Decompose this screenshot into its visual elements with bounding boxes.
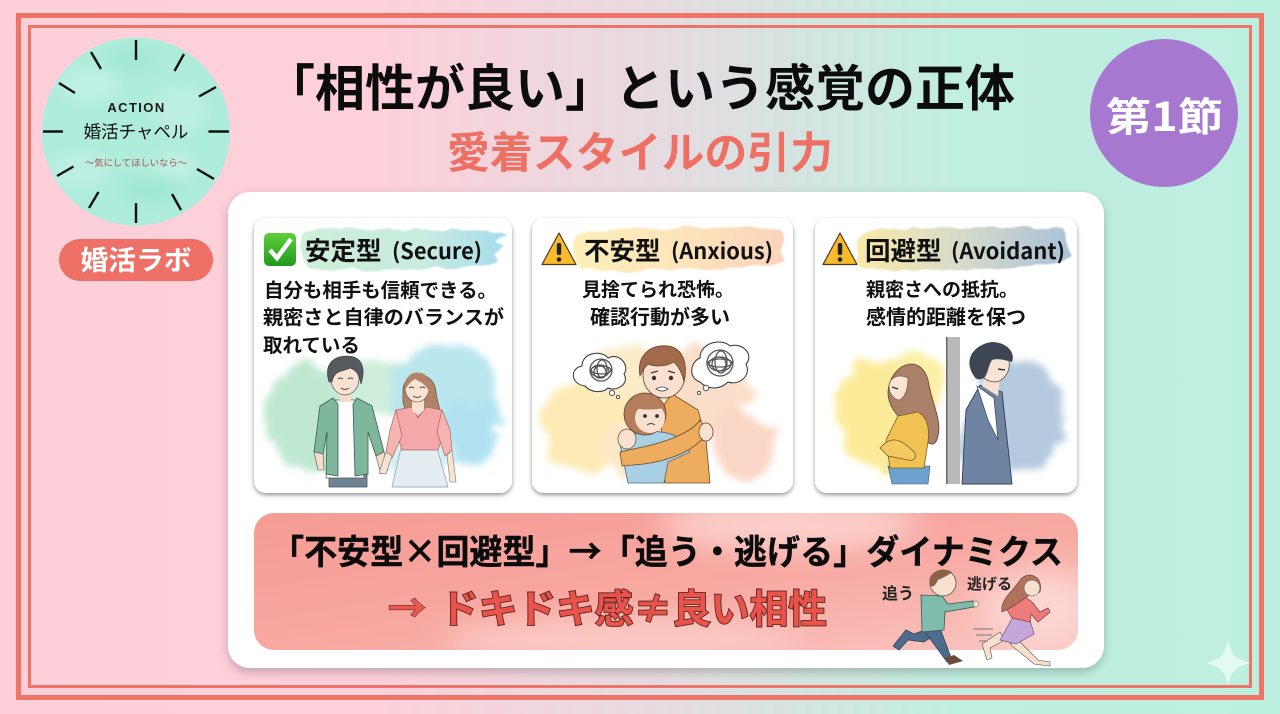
text: avoidant [866,275,1026,330]
label: chase: 追う [882,580,914,604]
heading: anxious: 不安型 [584,231,661,268]
woman [880,364,939,484]
woman [620,431,690,483]
clock ticks [43,40,229,223]
badge: 婚活ラボ [59,239,213,281]
man's arm [620,420,708,466]
illustration: wall between couple [880,337,1013,484]
text: anxious: 見捨てられ恐怖。 [582,275,734,302]
text: secure: 自分も相手も信頼できる。 [264,274,497,303]
text: secure: 取れている [263,329,360,358]
text: secure: 親密さと自律のバランスが [263,301,505,330]
illustration: anxious couple [573,342,749,483]
card: anxious [532,218,793,493]
banner line 2: → [388,578,426,633]
subtitle: 愛着スタイルの引力 [447,119,833,181]
logo text: ACTION [107,100,166,115]
watercolor wash: anxious [544,345,777,480]
header brush: anxious [573,228,786,270]
heading: secure: 安定型 [305,231,382,268]
logo text: 婚活チャペル [84,119,188,144]
icon: check mark [264,233,296,266]
logo badge [42,38,230,226]
heading: avoidant: 回避型 [865,231,942,268]
icon: warning triangle [542,233,576,264]
section badge [1090,39,1238,187]
text: avoidant: 親密さへの抵抗。 [866,275,1018,302]
badge: 婚活ラボ: 婚活ラボ [80,239,192,278]
banner line 1: 「不安型×回避型」→「追う・逃げる」ダイナミクス [271,525,1063,574]
heading: secure [305,231,482,268]
panel: main white [228,192,1104,668]
logo text [84,100,188,169]
card: avoidant [815,218,1077,493]
text: secure [263,274,505,358]
logo text: 〜気にしてほしいなら〜 [85,155,187,169]
man [660,394,710,483]
banner: dynamics [254,513,1078,666]
watercolor wash: avoidant [834,350,1064,478]
heading: anxious [584,231,773,268]
heading: anxious: (Anxious) [671,234,773,266]
illustration: running woman [982,575,1050,666]
watercolor wash: secure [268,344,503,478]
header brush: avoidant [856,227,1073,270]
man [962,342,1013,484]
thought clouds [573,342,749,399]
wall [947,337,960,484]
text: anxious [582,275,734,330]
heading: secure: (Secure) [392,234,482,266]
icon: warning triangle [823,233,857,264]
heading: avoidant: (Avoidant) [951,234,1065,266]
header brush: secure [301,228,506,270]
man [314,356,388,487]
heading: avoidant [865,231,1065,268]
text: avoidant: 感情的距離を保つ [866,301,1026,330]
banner line 2: ドキドキ感≠良い相性 [440,579,827,635]
label: flee: 逃げる [967,573,1012,594]
title: 「相性が良い」という感覚の正体 [265,49,1015,121]
section badge: 第1節 [1106,85,1223,143]
illustration: happy couple [314,356,456,487]
illustration: running man [893,570,979,665]
card: secure [254,218,512,493]
motion lines [973,629,993,641]
text: anxious: 確認行動が多い [590,301,730,330]
woman [379,373,456,487]
decorative sparkle [1205,640,1251,686]
